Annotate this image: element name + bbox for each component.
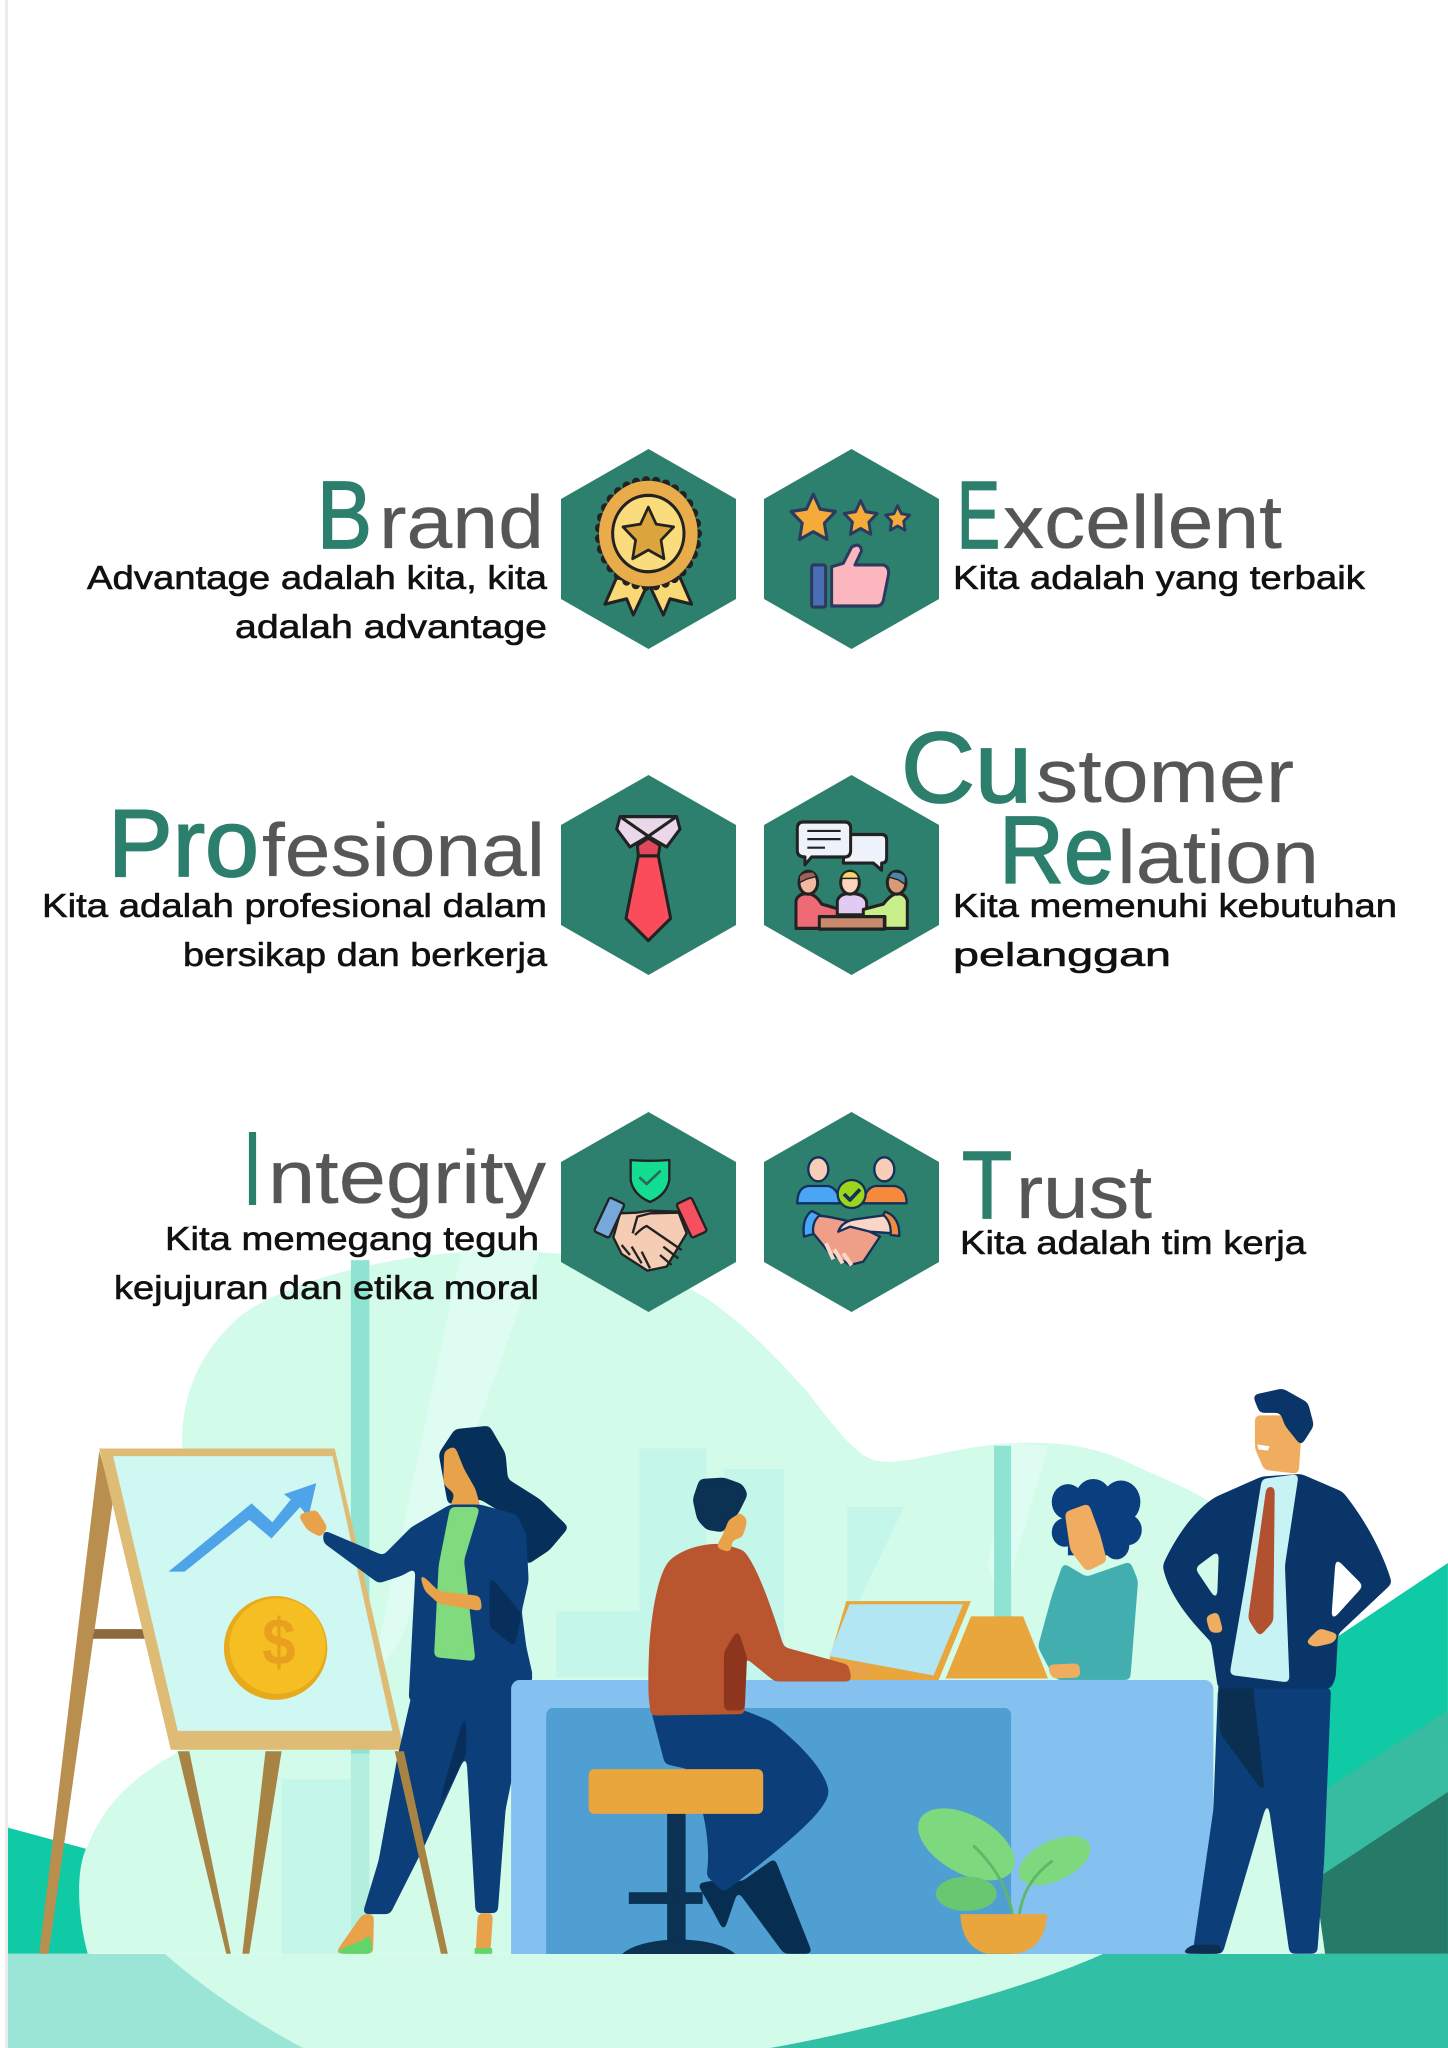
background teal hills right (1316, 1563, 1448, 1954)
text block: Customer Relation: pelanggan (953, 936, 1171, 973)
heading: Trust: rust (1016, 1150, 1152, 1234)
coin: $ (262, 1606, 296, 1679)
coin (224, 1596, 327, 1700)
standing man (1163, 1388, 1392, 1954)
text block: Integrity: kejujuran dan etika moral (114, 1269, 539, 1306)
icon: stars and thumbs up (791, 494, 910, 607)
heading: Profesional: Pro (108, 790, 259, 897)
heading: Excellent: E (957, 462, 1000, 569)
heading: Relation (999, 797, 1319, 904)
heading: Trust (962, 1132, 1152, 1239)
heading: Integrity: ntegrity (268, 1135, 547, 1219)
heading: Excellent (957, 462, 1282, 569)
text block: Profesional: bersikap dan berkerja (183, 936, 548, 973)
hexagon: Brand (561, 449, 736, 649)
background mint blob (79, 1251, 1325, 1954)
heading: Customer: stomer (1036, 734, 1294, 818)
hexagon: Profesional (561, 775, 736, 975)
seated man (648, 1477, 876, 1954)
icon: shield and handshake (594, 1160, 707, 1271)
text block: Brand (87, 462, 548, 645)
light window streaks (369, 1250, 1048, 1688)
heading: Customer: Cu (901, 712, 1032, 824)
text block: Profesional (42, 790, 548, 973)
stool seat (589, 1769, 763, 1814)
text block: Integrity: Kita memegang teguh (165, 1220, 539, 1257)
text block: Brand: Advantage adalah kita, kita (87, 559, 548, 596)
easel board (99, 1448, 404, 1750)
text block: Excellent: Kita adalah yang terbaik (953, 559, 1366, 596)
heading: Profesional (108, 790, 545, 897)
text block: Excellent (953, 462, 1366, 596)
heading: Brand: rand (379, 480, 544, 564)
window column right (994, 1446, 1011, 1619)
heading: Integrity: I (245, 1113, 260, 1225)
window column left (351, 1260, 369, 1954)
easel front legs (178, 1751, 282, 1954)
heading: Customer (901, 712, 1294, 824)
hexagon: Excellent (764, 449, 939, 649)
plant (908, 1794, 1097, 1954)
text block: Brand: adalah advantage (235, 608, 547, 645)
presenter woman (298, 1426, 569, 1954)
hexagon: Integrity (561, 1112, 736, 1312)
background teal hill left (8, 1828, 92, 1954)
text block: Customer Relation (901, 712, 1397, 973)
stool base (618, 1810, 740, 1985)
icon: award medal (599, 481, 698, 615)
heading: Relation: lation (1117, 815, 1319, 899)
heading: Integrity (245, 1113, 547, 1225)
hexagon: Customer Relation (764, 775, 939, 975)
colleague woman behind desk (1038, 1479, 1142, 1680)
heading: Profesional: fesional (262, 808, 545, 892)
left margin edge (0, 0, 8, 2048)
text block: Trust (960, 1132, 1307, 1261)
text block: Integrity (114, 1113, 547, 1306)
text block: Trust: Kita adalah tim kerja (960, 1224, 1307, 1261)
text block: Profesional: Kita adalah profesional dalam (42, 887, 547, 924)
heading: Brand (317, 462, 544, 569)
bottom band (8, 1954, 1448, 2048)
desk (511, 1680, 1213, 1965)
heading: Brand: B (317, 462, 372, 569)
heading: Excellent: xcellent (1003, 480, 1282, 564)
hexagon: Trust (764, 1112, 939, 1312)
chart arrow (169, 1483, 316, 1572)
text block: Customer Relation: Kita memenuhi kebutuhan (953, 887, 1397, 924)
easel right leg (395, 1751, 448, 1954)
laptop on desk (823, 1601, 1048, 1680)
heading: Relation: Re (999, 797, 1114, 904)
illustration: office team scene (8, 1250, 1448, 1985)
icon: customer meeting (796, 822, 907, 929)
easel back leg and crossbar (39, 1451, 145, 1954)
icon: team and handshake (797, 1157, 907, 1265)
background buildings (282, 1448, 904, 1954)
heading: Trust: T (962, 1132, 1012, 1239)
icon: necktie (617, 817, 680, 941)
